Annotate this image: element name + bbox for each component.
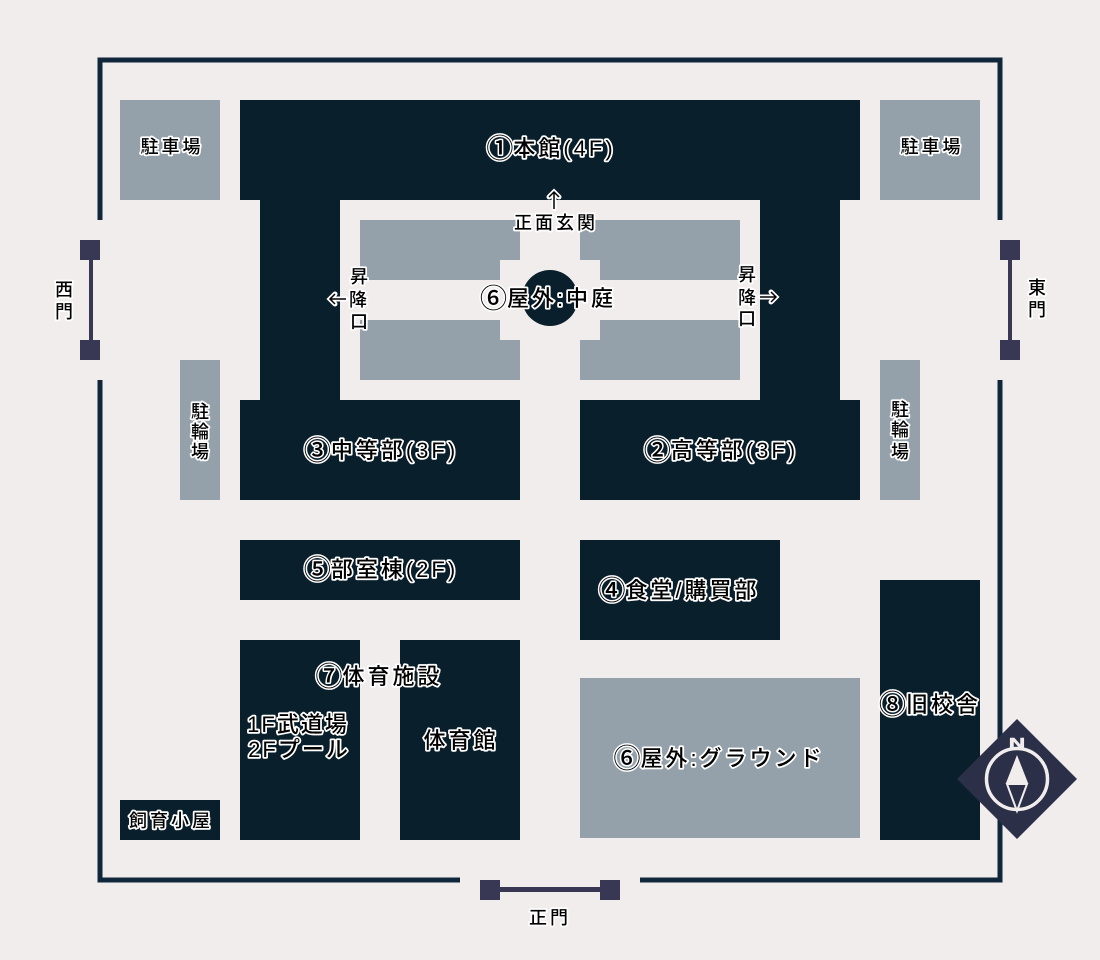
label: west stairs: 降 [349, 290, 367, 310]
animal hut [120, 800, 220, 840]
old school building [880, 580, 980, 840]
east gate [1000, 240, 1020, 360]
label: dojo and pool [247, 712, 350, 762]
label: junior high: ③ [304, 436, 331, 466]
label: bicycle parking west: 輪 [191, 422, 209, 442]
label: bicycle parking east: 輪 [891, 420, 909, 440]
label: senior high: ② [644, 436, 671, 466]
main school buildings [240, 100, 860, 500]
courtyard fountain [522, 270, 578, 326]
courtyard lawn south west [360, 320, 520, 380]
label: west gate: 西 [55, 280, 73, 300]
label: parking west: 駐車場 [140, 137, 204, 157]
label: west stairs: 口 [350, 312, 368, 332]
label: front entrance: 正面玄関 [514, 213, 598, 233]
label: east stairs [738, 265, 776, 329]
label: senior high: 高等部(3F) [671, 438, 798, 463]
campus boundary wall [100, 60, 1000, 880]
label: sports facilities: 体育施設 [342, 664, 443, 689]
label: bicycle parking west: 駐 [191, 402, 209, 422]
parking lot east [880, 100, 980, 200]
label: east stairs: 昇 [738, 265, 756, 285]
courtyard lawn north east [580, 220, 740, 280]
label: bicycle parking west [191, 402, 209, 462]
cafeteria [580, 540, 780, 640]
label: ground: 屋外:グラウンド [640, 746, 825, 771]
label: junior high: 中等部(3F) [331, 438, 458, 463]
label: west gate: 門 [55, 302, 73, 322]
courtyard lawn north west [360, 220, 520, 280]
parking lot west [120, 100, 220, 200]
label: dojo and pool: 2Fプール [248, 737, 350, 762]
label: west stairs [330, 267, 368, 332]
label: ground: ⑥ [613, 744, 640, 774]
label: club building: 部室棟(2F) [331, 557, 458, 582]
label: courtyard: 屋外:中庭 [507, 286, 616, 311]
label: east stairs: 降 [738, 288, 756, 308]
main gate [480, 880, 620, 900]
label: main gate: 正門 [529, 908, 571, 928]
compass [957, 719, 1077, 839]
courtyard lawn south east [580, 320, 740, 380]
label: east gate: 東 [1028, 278, 1046, 298]
label: main building: 本館(4F) [513, 136, 616, 161]
club building [240, 540, 520, 600]
label: east gate: 門 [1028, 300, 1046, 320]
label: animal hut: 飼育小屋 [129, 811, 213, 831]
label: bicycle parking east: 場 [891, 442, 909, 462]
label: west stairs: 昇 [350, 267, 368, 287]
gymnasium [400, 640, 520, 840]
sports ground [580, 678, 860, 838]
label: courtyard: ⑥ [480, 284, 507, 314]
label: bicycle parking west: 場 [191, 442, 209, 462]
label: west gate [55, 280, 73, 322]
label: sports facilities: ⑦ [315, 662, 342, 692]
label: parking east: 駐車場 [900, 137, 964, 157]
bicycle parking west [180, 360, 220, 500]
label: cafeteria: 食堂/購買部 [625, 578, 760, 603]
label: bicycle parking east: 駐 [891, 400, 909, 420]
bicycle parking east [880, 360, 920, 500]
label: east gate [1028, 278, 1046, 320]
west gate [80, 240, 100, 360]
label: gymnasium: 体育館 [423, 728, 499, 753]
label: front entrance [514, 192, 598, 233]
label: main building: ① [486, 134, 513, 164]
label: dojo and pool: 1F武道場 [247, 712, 349, 737]
compass north letter: N [1009, 735, 1025, 752]
dojo and pool [240, 640, 360, 840]
label: cafeteria: ④ [598, 576, 625, 606]
label: club building: ⑤ [304, 555, 331, 585]
label: east stairs: 口 [738, 309, 756, 329]
label: old school building: ⑧ [879, 690, 906, 720]
label: bicycle parking east [891, 400, 909, 462]
label: old school building: 旧校舎 [906, 692, 981, 717]
